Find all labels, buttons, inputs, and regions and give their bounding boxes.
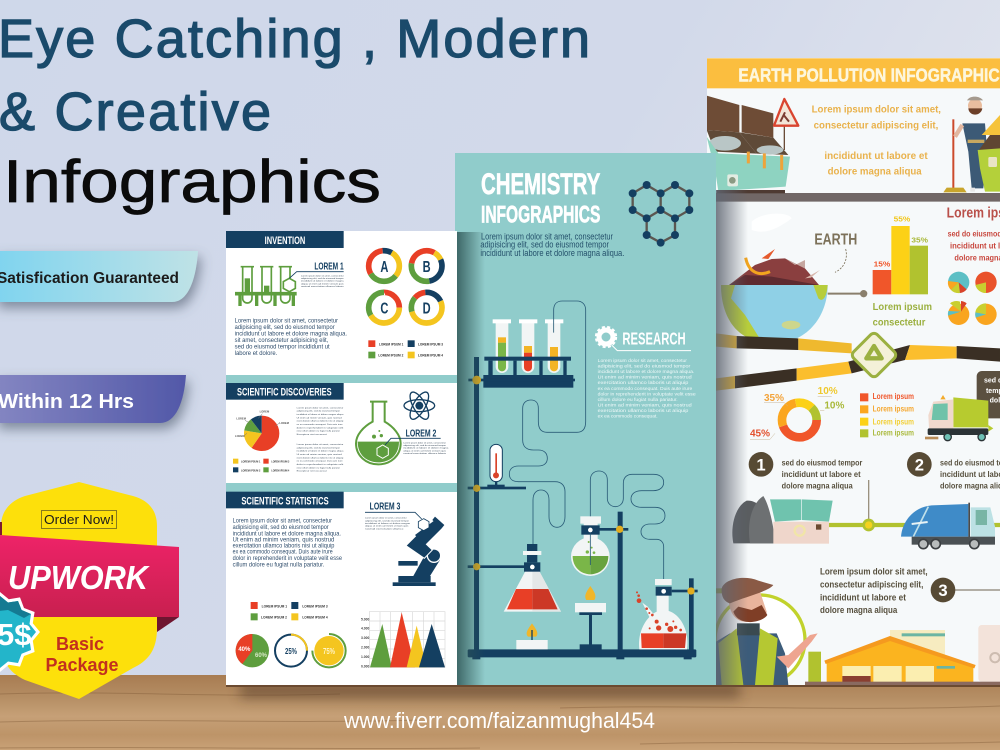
chemistry intro text: adipisicing elit, sed do eiusmod tempor bbox=[480, 240, 609, 250]
pie callouts: LOREM bbox=[236, 417, 247, 421]
pie legend: LOREM IPSUM 2 bbox=[241, 468, 261, 472]
lorem 1 callout: incididunt ut labore et dolore magna bbox=[301, 280, 345, 283]
donut legend: LOREM IPSUM 1 bbox=[379, 341, 404, 346]
discoveries columns: adipisicing elit, sed do eiusmod tempor bbox=[297, 446, 340, 449]
statistics legend bbox=[251, 602, 328, 620]
step 1: dolore magna aliqua bbox=[782, 481, 853, 491]
donut charts A B C D: C bbox=[380, 301, 388, 318]
step 3 text bbox=[820, 566, 928, 615]
title bbox=[0, 9, 590, 215]
ring 75 bbox=[312, 634, 346, 667]
lorem 3 callout bbox=[365, 502, 422, 530]
order now label: Order Now! bbox=[44, 513, 114, 527]
triangle chart: 3.000 bbox=[361, 636, 369, 640]
illustration: recycling plant bbox=[805, 625, 1000, 686]
lorem 2 callout: LOREM 2 bbox=[406, 429, 437, 440]
research text bbox=[598, 358, 696, 420]
discoveries columns: Excepteur sint occaecat bbox=[297, 433, 327, 436]
donut labels: 10% bbox=[818, 386, 838, 397]
icon: atom bbox=[404, 389, 435, 422]
illustration: dumpsters bbox=[707, 96, 790, 193]
timeline bbox=[828, 480, 1000, 531]
ribbon: satisfaction: Satisfication Guaranteed bbox=[0, 270, 179, 287]
step 2 bbox=[907, 452, 1000, 491]
panel 1 shadow on panel 2 bbox=[457, 232, 485, 685]
invention body text: sed do eiusmod tempor incididunt ut bbox=[235, 344, 330, 351]
discoveries columns bbox=[297, 406, 344, 473]
statistics body text: exercitation ullamco laboris nisi ut aliquip bbox=[233, 543, 335, 550]
discoveries columns: Ut enim ad minim veniam, quis nostrud bbox=[297, 453, 343, 456]
donut legend: LOREM IPSUM 2 bbox=[378, 353, 404, 358]
research text: Ut enim ad minim veniam, quis nostrud bbox=[598, 374, 692, 380]
badge: upwork package bbox=[0, 482, 179, 699]
ribbon: satisfaction bbox=[0, 251, 198, 302]
lorem 3 callout: nostrud exercitation ullamco bbox=[365, 527, 405, 530]
pie 40 60: 40% bbox=[238, 647, 251, 653]
pie legend: LOREM IPSUM 1 bbox=[241, 460, 261, 464]
pollution intro text: dolore magna aliqua bbox=[828, 166, 922, 177]
discoveries columns: incididunt ut labore et dolore magna aliqua bbox=[297, 450, 344, 453]
pie callouts: LOREM bbox=[279, 421, 290, 425]
title: Eye Catching , Modern bbox=[0, 9, 590, 69]
donut legend bbox=[860, 392, 914, 438]
discoveries columns: esse cillum dolore eu fugiat nulla pariatur bbox=[297, 430, 340, 433]
donut labels: 35% bbox=[764, 393, 784, 404]
order now label bbox=[42, 510, 116, 528]
discoveries columns: Excepteur sint occaecat bbox=[297, 470, 327, 473]
donut chart bbox=[782, 403, 817, 437]
invention header bbox=[226, 231, 344, 248]
bar chart caption: Lorem ipsum bbox=[873, 302, 932, 313]
statistics header bbox=[226, 492, 344, 508]
pie 40 60 bbox=[236, 634, 269, 667]
icon: microscope bbox=[393, 517, 444, 586]
lab stand bbox=[468, 357, 698, 659]
lorem 2 callout bbox=[385, 429, 449, 455]
statistics body text: incididunt ut labore et dolore magna aliqua. bbox=[233, 530, 341, 537]
bar chart caption: consectetur bbox=[873, 317, 925, 328]
road strip bbox=[716, 193, 1000, 202]
pie chart bbox=[253, 424, 270, 442]
gold clamps bbox=[472, 376, 695, 595]
statistics legend: LOREM IPSUM 2 bbox=[261, 615, 288, 620]
step 3 text: incididunt ut labore et bbox=[820, 592, 906, 602]
discoveries columns: Lorem ipsum dolor sit amet, consectetur bbox=[297, 406, 344, 409]
pollution header bbox=[707, 58, 1000, 88]
research text: dolor in reprehenderit in voluptate velit esse bbox=[598, 392, 696, 398]
donut charts A B C D: D bbox=[423, 301, 431, 318]
pie legend: LOREM IPSUM 4 bbox=[271, 468, 290, 472]
lorem 1 callout: aliqua ut enim ad minim veniam quis bbox=[301, 282, 344, 285]
pollution intro text bbox=[812, 104, 941, 177]
lorem 1 callout: nostrud exercitation ullamco laboris bbox=[301, 285, 344, 288]
footer url: www.fiverr.com/faizanmughal454 bbox=[343, 708, 655, 733]
basic package label: Package bbox=[45, 655, 119, 675]
discoveries columns: adipisicing elit, sed do eiusmod tempor bbox=[297, 410, 340, 413]
step 1: 1 bbox=[756, 455, 766, 474]
pie legend: LOREM IPSUM 3 bbox=[271, 460, 290, 464]
illustration: earth bowl bbox=[721, 249, 868, 338]
research heading bbox=[596, 327, 691, 351]
invention body text: sit amet, consectetur adipisicing elit, bbox=[235, 337, 328, 344]
panel: chemistry bbox=[455, 153, 716, 685]
donut charts A B C D: A bbox=[380, 259, 388, 276]
bar chart: 15% bbox=[874, 259, 891, 268]
triangle chart: 2.000 bbox=[361, 645, 369, 649]
research heading: RESEARCH bbox=[622, 328, 686, 348]
pie callouts bbox=[235, 410, 290, 438]
research text: cillum dolore eu fugiat nulla pariatur. bbox=[598, 397, 678, 403]
research text: Lorem ipsum dolor sit amet, consectetur bbox=[598, 358, 687, 364]
donut labels bbox=[750, 386, 844, 440]
earth label bbox=[814, 231, 857, 272]
discoveries columns: exercitation ullamco laboris nisi ut aliquip bbox=[297, 456, 344, 459]
invention body text: incididunt ut labore et dolore magna aliqua. bbox=[235, 331, 347, 338]
panel: earth pollution bbox=[707, 58, 1000, 686]
ring 25: 25% bbox=[285, 646, 297, 656]
invention body text: adipisicing elit, sed do eiusmod tempor bbox=[235, 324, 335, 331]
burner on stand bbox=[575, 586, 606, 645]
lorem 3 callout: LOREM 3 bbox=[370, 502, 401, 513]
triangle chart: 5.000 bbox=[361, 617, 369, 621]
illustration: garbage truck bbox=[901, 503, 995, 549]
title: & Creative bbox=[0, 82, 271, 142]
illustration: sweeper truck bbox=[925, 395, 993, 441]
discoveries columns: esse cillum dolore eu fugiat nulla pariatur bbox=[297, 466, 340, 469]
pie callouts: LOREM bbox=[260, 410, 270, 414]
panel: science infographic bbox=[226, 231, 457, 685]
basic package label bbox=[45, 634, 119, 675]
discoveries columns: Ut enim ad minim veniam, quis nostrud bbox=[297, 416, 343, 419]
pollution intro text: Lorem ipsum dolor sit amet, bbox=[812, 104, 941, 115]
ring 75: 75% bbox=[323, 646, 335, 656]
red heading block bbox=[947, 205, 1000, 262]
step 1: incididunt ut labore et bbox=[782, 469, 861, 479]
statistics body text bbox=[233, 518, 343, 568]
icon: recycle diamond bbox=[850, 331, 898, 379]
bar chart bbox=[873, 215, 928, 294]
discoveries columns: exercitation ullamco laboris nisi ut aliquip bbox=[297, 420, 344, 423]
statistics body text: dolor in reprehenderit in voluptate velit esse bbox=[233, 555, 343, 562]
triangle chart: 0.000 bbox=[361, 664, 369, 668]
chemistry title: INFOGRAPHICS bbox=[481, 202, 600, 229]
research text: exercitation ullamco laboris ut aliquip bbox=[598, 380, 689, 386]
step 3 text: dolore magna aliqua bbox=[820, 605, 898, 615]
ring 25 bbox=[275, 635, 307, 667]
pollution intro text: incididunt ut labore et bbox=[824, 151, 928, 162]
step 3 marker: 3 bbox=[938, 581, 948, 600]
lorem 2 callout: aliqua ut enim ad minim veniam quis bbox=[403, 449, 446, 452]
step 3 text: consectetur adipiscing elit, bbox=[820, 580, 923, 590]
discoveries columns: ex ea commodo consequat. Duis aute irure bbox=[297, 423, 344, 426]
triangle chart bbox=[361, 612, 445, 668]
donut labels: 45% bbox=[750, 429, 770, 440]
lorem 2 callout: nostrud exercitation ullamco laboris bbox=[403, 452, 446, 455]
burner on base bbox=[516, 623, 548, 649]
illustration: green bin bbox=[978, 115, 1000, 192]
research text: Ut enim ad minim veniam, quis nostrud bbox=[598, 403, 692, 409]
step 1: sed do eiusmod tempor bbox=[782, 457, 863, 467]
discoveries columns: dolor in reprehenderit in voluptate velit bbox=[297, 426, 344, 429]
bar chart: 55% bbox=[894, 215, 911, 224]
donut legend: Lorem ipsum bbox=[873, 417, 914, 426]
ribbon: delivery bbox=[0, 375, 186, 423]
step 3 marker bbox=[931, 578, 1000, 602]
discoveries columns: Lorem ipsum dolor sit amet, consectetur bbox=[297, 443, 344, 446]
price star bbox=[0, 592, 40, 672]
illustration: sweeper bbox=[943, 97, 987, 192]
research text: exercitation ullamco laboris ut aliquip bbox=[598, 408, 689, 414]
invention body text: labore et dolore. bbox=[235, 350, 278, 357]
triangle chart: 1.000 bbox=[361, 655, 369, 659]
second glass tubing bbox=[590, 471, 665, 580]
icon: warning sign bbox=[774, 99, 798, 150]
lorem 2 callout: incididunt ut labore et dolore magna bbox=[403, 447, 449, 450]
discoveries columns: incididunt ut labore et dolore magna aliqua bbox=[297, 413, 344, 416]
ribbon: delivery: Within 12 Hrs bbox=[0, 391, 134, 413]
statistics body text: cillum dolore eu fugiat nulla pariatur. bbox=[233, 561, 325, 568]
discoveries columns: dolor in reprehenderit in voluptate velit bbox=[297, 463, 344, 466]
lorem 2 callout: Lorem ipsum dolor sit amet, consectetur bbox=[403, 441, 446, 444]
research text: adipisicing elit, sed do eiusmod tempor bbox=[598, 363, 691, 369]
statistics legend: LOREM IPSUM 1 bbox=[262, 603, 288, 608]
basic package label: Basic bbox=[56, 634, 104, 654]
illustration: worker bbox=[715, 578, 818, 685]
discoveries header bbox=[226, 383, 344, 400]
test tube rack bbox=[468, 319, 575, 388]
pie legend bbox=[233, 459, 290, 472]
research text: ex ea commodo consequat. bbox=[598, 414, 658, 420]
conical flask bbox=[504, 544, 561, 612]
icon: green flask bbox=[356, 402, 401, 464]
donut legend: Lorem ipsum bbox=[873, 405, 914, 414]
donut legend bbox=[368, 340, 444, 358]
pollution intro text: consectetur adipiscing elit, bbox=[814, 120, 938, 131]
statistics header: SCIENTIFIC STATISTICS bbox=[241, 495, 329, 507]
statistics body text: Ut enim ad minim veniam, quis nostrud bbox=[233, 536, 335, 543]
statistics legend: LOREM IPSUM 4 bbox=[302, 615, 328, 620]
discoveries columns: ex ea commodo consequat. Duis aute irure bbox=[297, 460, 344, 463]
donut legend: Lorem ipsum bbox=[873, 429, 914, 438]
chemistry title bbox=[481, 168, 600, 229]
statistics body text: adipisicing elit, sed do eiusmod tempor bbox=[233, 524, 329, 531]
striped band bbox=[716, 333, 1000, 391]
lorem 3 callout: aliqua ut enim ad minim veniam quis bbox=[365, 525, 408, 528]
donut legend: LOREM IPSUM 3 bbox=[418, 341, 444, 346]
donut charts A B C D: B bbox=[423, 259, 431, 276]
icon: green test tubes bbox=[235, 267, 297, 306]
invention header: INVENTION bbox=[265, 235, 305, 247]
step 1 bbox=[749, 452, 863, 491]
lorem 1 callout: LOREM 1 bbox=[314, 261, 344, 272]
lorem 1 callout: adipisicing elit, sed do eiusmod tempor bbox=[301, 277, 344, 280]
research text: incididunt ut labore et dolore magna aliqua. bbox=[598, 369, 694, 375]
thermometer bbox=[487, 444, 505, 487]
panel 2 shadow on panel 3 bbox=[716, 190, 748, 685]
lorem 3 callout: incididunt ut labore et dolore magna bbox=[365, 522, 411, 525]
step 3 text: Lorem ipsum dolor sit amet, bbox=[820, 566, 928, 576]
icon: molecule bbox=[629, 181, 693, 247]
red round flask bbox=[636, 579, 687, 649]
pink ribbon: UPWORK bbox=[8, 559, 150, 596]
statistics body text: Lorem ipsum dolor sit amet, consectetur bbox=[233, 518, 332, 525]
chemistry intro text: incididunt ut labore et dolore magna aliqua. bbox=[480, 248, 624, 258]
lorem 1 callout: Lorem ipsum dolor sit amet, consectetur bbox=[301, 274, 344, 277]
bar chart: 35% bbox=[911, 236, 928, 245]
donut charts A B C D bbox=[369, 251, 442, 323]
title: Infographics bbox=[3, 148, 381, 215]
statistics body text: ex ea commodo consequat. Duis aute irure bbox=[233, 549, 333, 556]
illustration: trash bags and container bbox=[732, 496, 833, 544]
statistics legend: LOREM IPSUM 3 bbox=[302, 603, 328, 608]
step 2: 2 bbox=[915, 455, 924, 474]
pie callouts: LOREM bbox=[235, 434, 245, 438]
pink ribbon bbox=[0, 522, 179, 632]
small pie charts bbox=[948, 272, 997, 325]
research text: ex ea commodo consequat. Duis aute irure bbox=[598, 386, 693, 392]
lorem 1 callout bbox=[289, 261, 345, 288]
chemistry intro text bbox=[480, 231, 624, 258]
glass tubing bbox=[509, 301, 586, 547]
chemistry title: CHEMISTRY bbox=[481, 168, 600, 201]
bar chart caption bbox=[873, 302, 932, 326]
triangle chart: 4.000 bbox=[361, 627, 369, 631]
donut legend: LOREM IPSUM 4 bbox=[418, 353, 444, 358]
donut legend: Lorem ipsum bbox=[873, 392, 914, 401]
pie 40 60: 60% bbox=[255, 653, 268, 659]
invention body text bbox=[235, 317, 347, 357]
discoveries header: SCIENTIFIC DISCOVERIES bbox=[237, 387, 332, 399]
round green flask bbox=[571, 516, 610, 576]
lorem 3 callout: adipisicing elit, sed do eiusmod tempor bbox=[365, 519, 409, 522]
donut labels: 10% bbox=[824, 400, 844, 411]
lorem 3 callout: Lorem ipsum dolor sit amet, consectetur bbox=[365, 517, 407, 520]
earth label: EARTH bbox=[814, 231, 857, 248]
wooden table bbox=[0, 675, 1000, 750]
lorem 2 callout: adipisicing elit, sed do eiusmod tempor bbox=[403, 444, 446, 447]
chemistry intro text: Lorem ipsum dolor sit amet, consectetur bbox=[481, 231, 613, 241]
invention body text: Lorem ipsum dolor sit amet, consectetur bbox=[235, 317, 339, 324]
speech box bbox=[977, 371, 1000, 418]
